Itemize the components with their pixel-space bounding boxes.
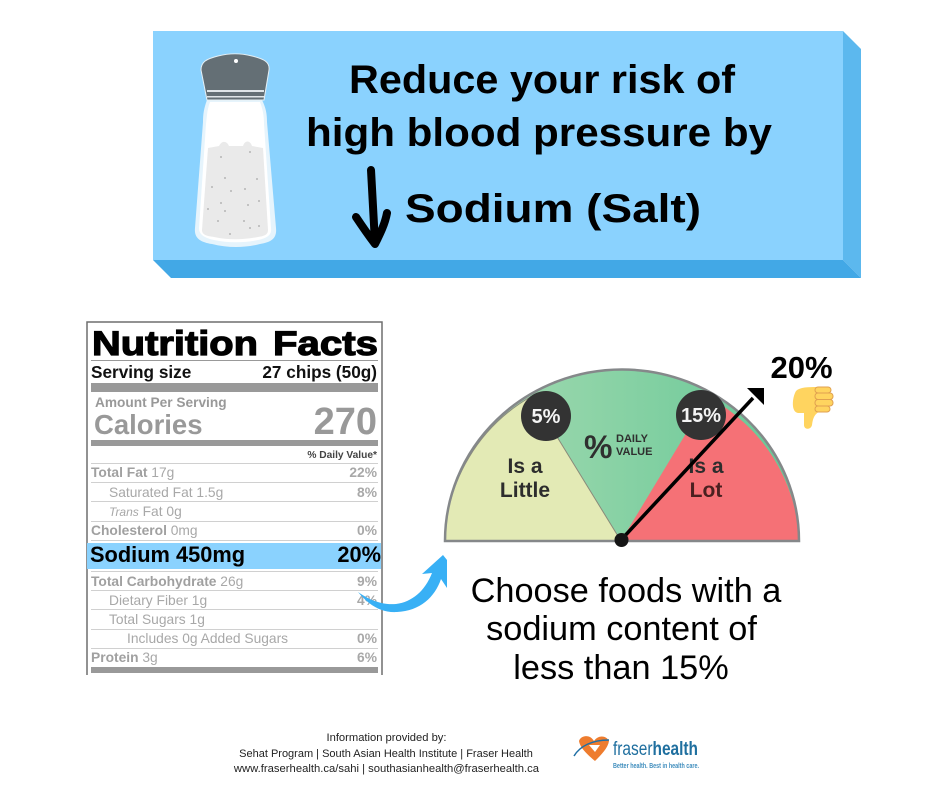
badge: 5% xyxy=(521,391,571,441)
badge: 15% xyxy=(676,390,726,440)
footer: credits: Sehat Program | South Asian Health Institute | Fraser Health xyxy=(239,748,533,760)
arrow: curved blue arrow xyxy=(358,555,447,612)
nutrient rows: Total Carbohydrate 26g xyxy=(91,574,243,589)
footer: credits: Information provided by: xyxy=(326,732,447,744)
text: recommendation xyxy=(471,572,782,687)
nutrient rows: 6% xyxy=(357,650,377,665)
calories xyxy=(94,395,377,443)
needle arrow xyxy=(614,388,764,547)
logo: fraser health xyxy=(574,736,699,770)
nutrient rows: 8% xyxy=(357,485,377,500)
calories: Calories xyxy=(94,409,203,440)
serving size: 27 chips (50g) xyxy=(262,362,377,382)
heading: line 3: Sodium (Salt) xyxy=(405,187,701,231)
gauge labels: Lot xyxy=(690,479,722,502)
text: recommendation: sodium content of xyxy=(486,610,757,648)
logo: fraser health: fraserhealth xyxy=(613,739,698,760)
percent daily value label xyxy=(584,429,652,465)
icon: down arrow xyxy=(356,170,387,244)
heading: line 1: Reduce your risk of xyxy=(349,58,736,102)
footer: credits: www.fraserhealth.ca/sahi | southasianhealth@fraserhealth.ca xyxy=(233,763,540,775)
calories: 270 xyxy=(314,401,377,443)
nutrient rows: 9% xyxy=(357,574,377,589)
title: nutrition facts: Nutrition xyxy=(92,325,258,363)
nutrient rows: 0% xyxy=(357,631,377,646)
percent daily value label: DAILY xyxy=(616,433,649,445)
title: nutrition facts: Facts xyxy=(273,325,378,363)
gauge labels: Little xyxy=(500,479,550,502)
percent daily value label: VALUE xyxy=(616,446,652,458)
title: nutrition facts xyxy=(92,325,378,363)
chart: percent daily value gauge xyxy=(445,370,799,547)
heading: line 2: high blood pressure by xyxy=(306,111,773,155)
icon: thumbs down xyxy=(793,387,833,429)
daily value header: % Daily Value* xyxy=(307,450,377,461)
percent daily value label: % xyxy=(584,429,612,465)
nutrient rows xyxy=(91,465,377,665)
text: recommendation: less than 15% xyxy=(513,649,729,687)
gauge labels: Is a xyxy=(507,455,543,478)
icon: salt shaker xyxy=(195,54,276,247)
serving size: Serving size xyxy=(91,362,191,382)
nutrient rows: Total Fat 17g xyxy=(91,465,174,480)
logo: fraser health: Better health. Best in health care. xyxy=(613,763,699,770)
nutrient rows: Cholesterol 0mg xyxy=(91,523,198,538)
sodium highlight row xyxy=(87,542,381,569)
nutrient rows: Dietary Fiber 1g xyxy=(109,593,207,608)
serving size xyxy=(91,362,377,382)
label: 20%: 20% xyxy=(770,350,833,385)
nutrient rows: Total Sugars 1g xyxy=(109,612,205,627)
gauge labels: Is a xyxy=(688,455,724,478)
text: recommendation: Choose foods with a xyxy=(471,572,782,610)
nutrient rows: Includes 0g Added Sugars xyxy=(127,631,288,646)
panel: nutrition facts label xyxy=(87,322,382,675)
nutrient rows: 0% xyxy=(357,523,377,538)
nutrient rows: Protein 3g xyxy=(91,650,158,665)
nutrient rows: Saturated Fat 1.5g xyxy=(109,485,223,500)
footer: credits xyxy=(233,732,540,775)
panel: header banner xyxy=(153,31,861,278)
badge: 5%: 5% xyxy=(532,406,561,428)
nutrient rows: 4% xyxy=(357,593,377,608)
calories: Amount Per Serving xyxy=(95,395,227,410)
gauge labels xyxy=(500,455,724,502)
badge: 15%: 15% xyxy=(681,405,721,427)
sodium highlight row: Sodium 450mg xyxy=(90,542,245,567)
nutrient rows: Trans Fat 0g xyxy=(109,504,182,519)
sodium highlight row: 20% xyxy=(337,542,381,567)
nutrient rows: 22% xyxy=(349,465,377,480)
